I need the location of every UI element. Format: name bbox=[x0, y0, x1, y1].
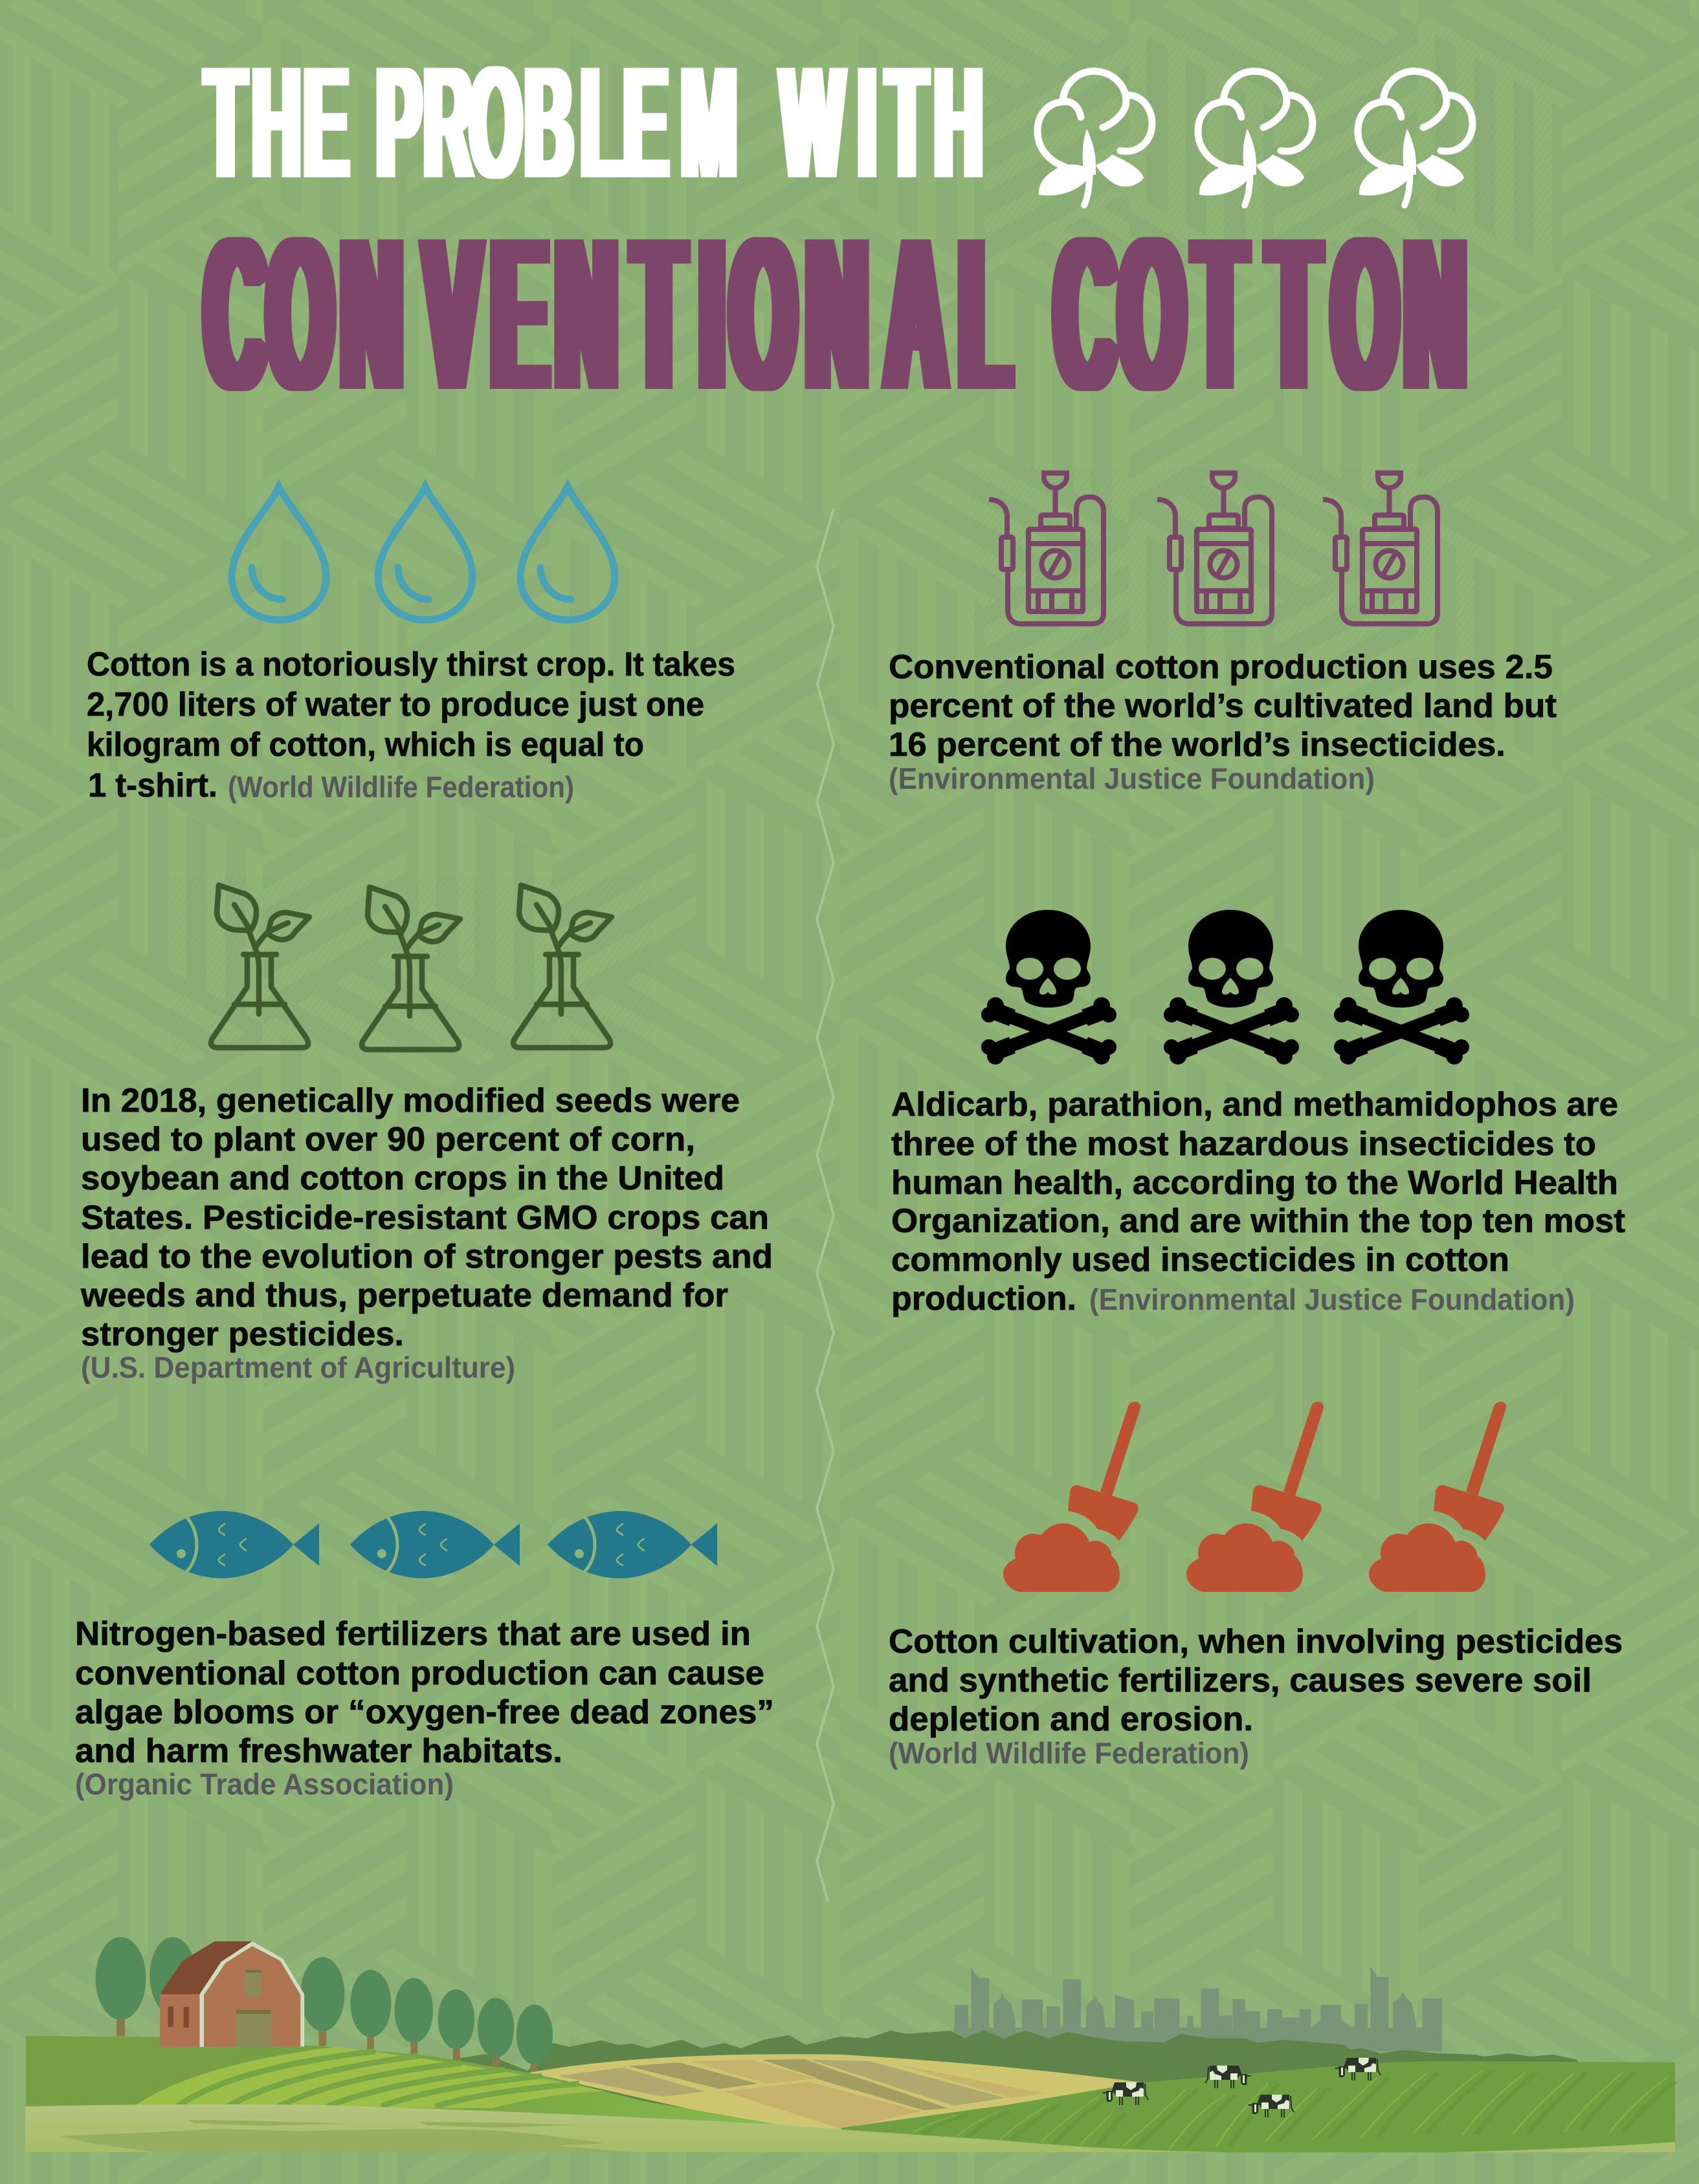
text: GMO: (U.S. Department of Agriculture) bbox=[81, 1351, 515, 1384]
text: GMO: used to plant over 90 percent of corn, bbox=[81, 1121, 695, 1158]
row of trees and barn bbox=[96, 1937, 553, 2073]
text: hazardous: human health, according to the World Health bbox=[891, 1164, 1618, 1202]
panel: insecticide land use bbox=[889, 473, 1557, 795]
pale foreground bbox=[25, 2104, 1225, 2152]
text: fertilizers: algae blooms or “oxygen-free dead zones” bbox=[75, 1693, 774, 1731]
text: insecticides: Conventional cotton production uses 2.5 bbox=[889, 648, 1553, 686]
panel: water bbox=[87, 487, 735, 804]
title line 2: CONVENTIONAL COTTON bbox=[206, 192, 1465, 435]
text: insecticides: (Environmental Justice Foundation) bbox=[889, 762, 1375, 795]
text: insecticides: 16 percent of the world’s insecticides. bbox=[889, 726, 1505, 764]
panel: fertilizers bbox=[75, 1511, 774, 1801]
text: hazardous: three of the most hazardous insecticides to bbox=[891, 1125, 1596, 1163]
striped crop rows bbox=[134, 2047, 606, 2108]
icon: sprayers bbox=[989, 473, 1438, 624]
text: hazardous bbox=[891, 1086, 1625, 1318]
text: GMO bbox=[80, 1082, 773, 1384]
city skyline bbox=[953, 1966, 1442, 2051]
text: hazardous: production. bbox=[891, 1280, 1076, 1318]
text: water: 2,700 liters of water to produce just one bbox=[87, 686, 704, 723]
text: GMO: soybean and cotton crops in the United bbox=[81, 1160, 724, 1197]
text: fertilizers bbox=[75, 1615, 774, 1801]
text: fertilizers: (Organic Trade Association) bbox=[75, 1767, 454, 1801]
icon: skulls and crossbones bbox=[981, 910, 1469, 1064]
text: fertilizers: Nitrogen-based fertilizers that are used in bbox=[75, 1615, 751, 1653]
text: GMO: weeds and thus, perpetuate demand for bbox=[80, 1277, 728, 1314]
text: soil: (World Wildlife Federation) bbox=[889, 1736, 1249, 1770]
left green hill bbox=[26, 2036, 778, 2135]
text: water: (World Wildlife Federation) bbox=[228, 770, 574, 804]
text: hazardous: commonly used insecticides in cotton bbox=[891, 1241, 1509, 1279]
text: water bbox=[87, 646, 735, 804]
text: fertilizers: conventional cotton production can cause bbox=[75, 1655, 764, 1692]
text: soil bbox=[889, 1623, 1623, 1770]
panel: hazardous insecticides bbox=[891, 910, 1625, 1318]
icon: water drops bbox=[232, 487, 615, 620]
panel: GMO seeds bbox=[80, 885, 773, 1384]
text: GMO: stronger pesticides. bbox=[81, 1316, 404, 1353]
text: soil: depletion and erosion. bbox=[889, 1701, 1253, 1738]
text: GMO: In 2018, genetically modified seeds were bbox=[81, 1082, 740, 1120]
text: soil: Cotton cultivation, when involving pesticides bbox=[889, 1623, 1623, 1660]
cows bbox=[1102, 2058, 1381, 2117]
icon: shovels and soil bbox=[1003, 1402, 1506, 1592]
text: water: Cotton is a notoriously thirst crop. It takes bbox=[87, 646, 735, 683]
panel: soil depletion bbox=[889, 1402, 1623, 1770]
text: soil: and synthetic fertilizers, causes severe soil bbox=[889, 1662, 1592, 1699]
title bbox=[205, 33, 1465, 435]
text: GMO: States. Pesticide-resistant GMO crops can bbox=[81, 1199, 769, 1237]
right green hill with furrows bbox=[841, 2061, 1675, 2152]
icon: fish bbox=[150, 1511, 717, 1578]
text: GMO: lead to the evolution of stronger pests and bbox=[81, 1238, 773, 1275]
illustration: farm landscape bbox=[25, 1937, 1675, 2152]
text: hazardous: Organization, and are within the top ten most bbox=[891, 1202, 1625, 1240]
text: hazardous: (Environmental Justice Foundation) bbox=[1089, 1283, 1575, 1316]
text: water: 1 t-shirt. bbox=[88, 767, 217, 804]
icon: flasks with sprouts bbox=[211, 885, 612, 1050]
text: water: kilogram of cotton, which is equal to bbox=[87, 726, 644, 764]
text: hazardous: Aldicarb, parathion, and methamidophos are bbox=[891, 1086, 1618, 1123]
zigzag divider bbox=[817, 509, 834, 1901]
text: insecticides bbox=[889, 648, 1557, 795]
icons: cotton bolls bbox=[1038, 71, 1472, 205]
title line 1: THE PROBLEM WITH bbox=[205, 33, 983, 211]
text: insecticides: percent of the world’s cultivated land but bbox=[889, 687, 1557, 725]
text: fertilizers: and harm freshwater habitats. bbox=[75, 1732, 562, 1770]
treeline bbox=[450, 2030, 1577, 2135]
barn bbox=[160, 1941, 304, 2047]
yellow patchwork fields bbox=[529, 2054, 1142, 2135]
